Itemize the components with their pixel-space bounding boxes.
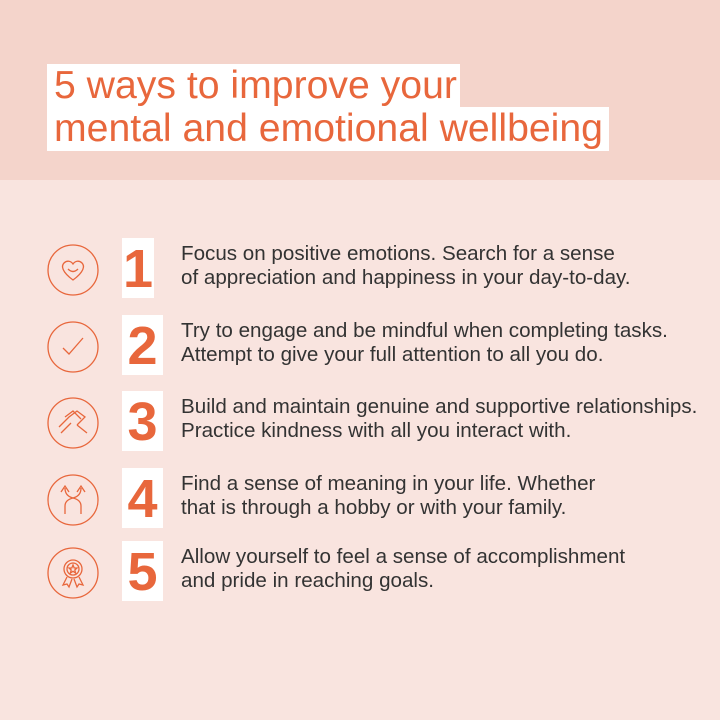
text 5: Allow yourself to feel a sense of accomplishment	[181, 545, 625, 568]
text 2	[181, 319, 668, 366]
number 5: 5	[127, 542, 158, 602]
text 4: that is through a hobby or with your family.	[181, 496, 566, 519]
item 1	[47, 238, 631, 299]
number 4: 4	[127, 469, 158, 529]
icon: crossing arrows	[47, 474, 99, 526]
icon: award	[47, 547, 99, 599]
icon: check	[47, 321, 99, 373]
number 3: 3	[127, 392, 158, 452]
title: mental and emotional wellbeing	[54, 107, 603, 150]
text 1	[181, 242, 631, 289]
number 2: 2	[127, 316, 158, 376]
item 2	[47, 315, 668, 376]
text 3: Practice kindness with all you interact with.	[181, 419, 571, 442]
text 4: Find a sense of meaning in your life. Whether	[181, 472, 595, 495]
text 1: Focus on positive emotions. Search for a sense	[181, 242, 615, 265]
title	[47, 64, 609, 151]
text 3: Build and maintain genuine and supportive relationships.	[181, 395, 697, 418]
text 2: Try to engage and be mindful when completing tasks.	[181, 319, 668, 342]
text 4	[181, 472, 595, 519]
text 3	[181, 395, 697, 442]
text 5	[181, 545, 625, 592]
icon: heart	[47, 244, 99, 296]
item 5	[47, 541, 625, 602]
icon: handshake	[47, 397, 99, 449]
number 1: 1	[123, 239, 153, 299]
text 5: and pride in reaching goals.	[181, 569, 434, 592]
title: 5 ways to improve your	[54, 64, 457, 107]
item 3	[47, 391, 697, 452]
item 4	[47, 468, 595, 529]
text 1: of appreciation and happiness in your day-to-day.	[181, 266, 631, 289]
text 2: Attempt to give your full attention to all you do.	[181, 343, 603, 366]
